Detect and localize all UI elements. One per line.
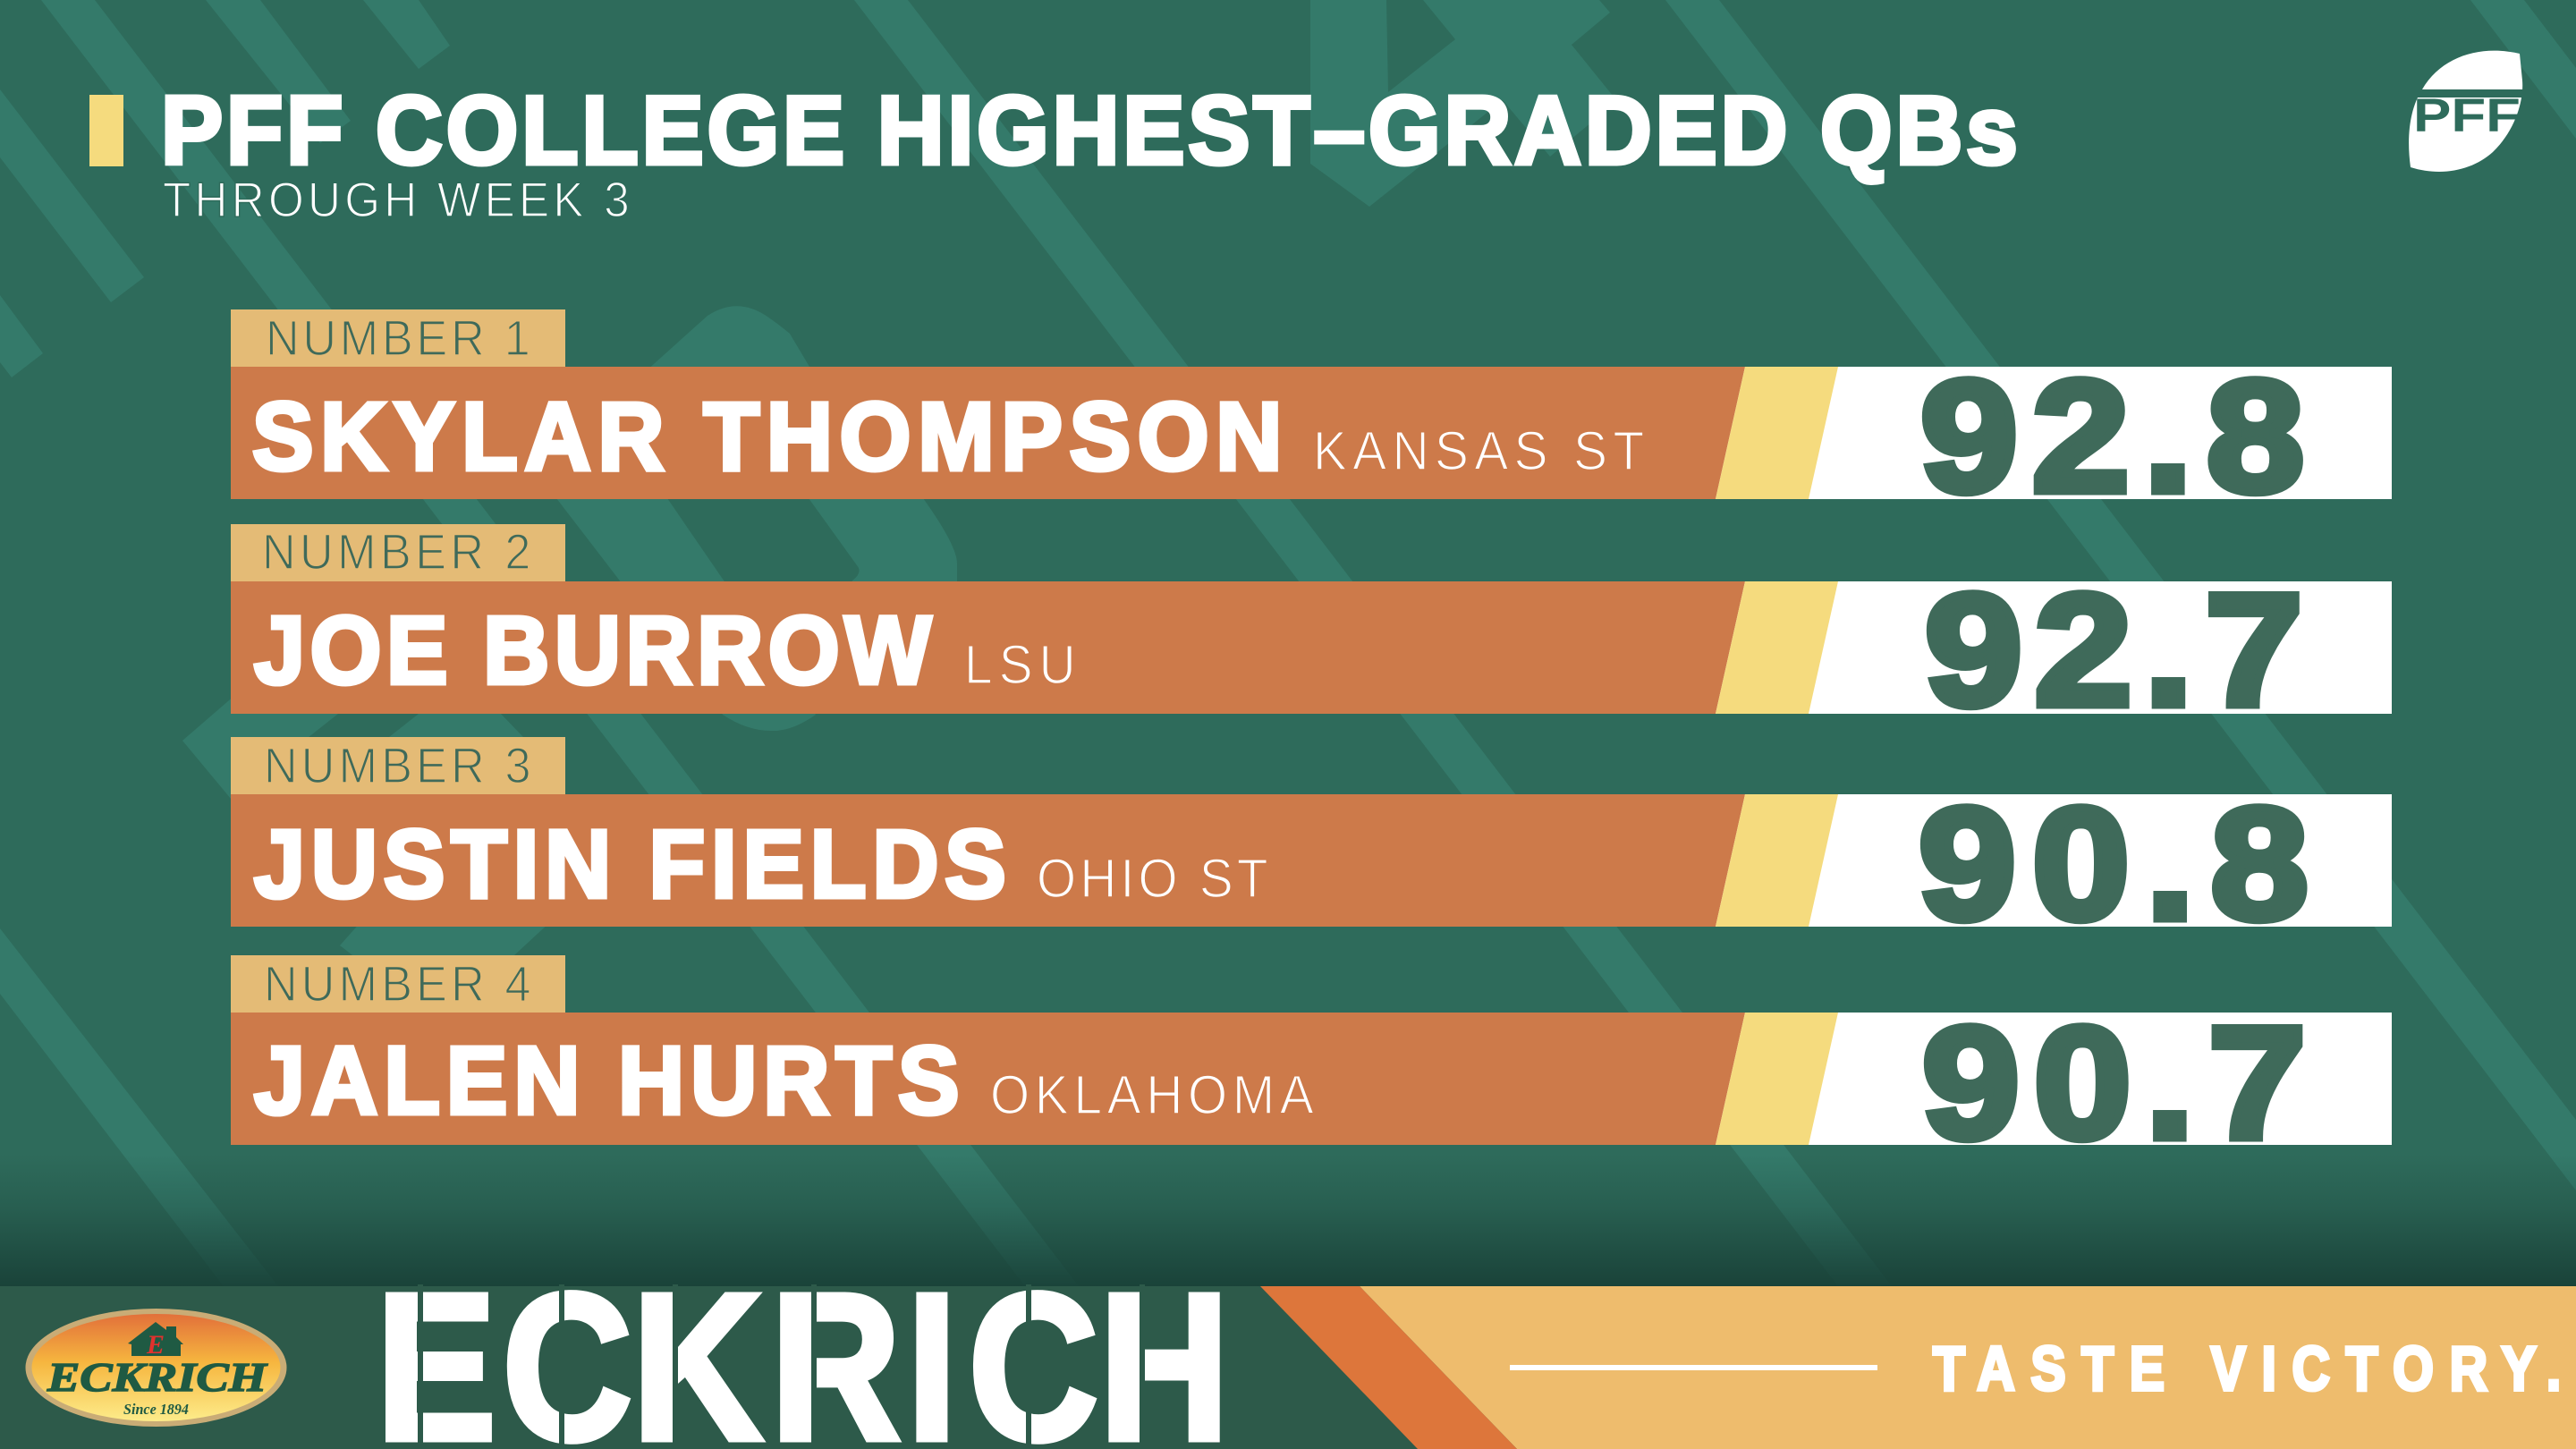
- score panel 4: [1699, 1013, 2392, 1145]
- team 4: OKLAHOMA: [990, 1065, 1314, 1125]
- grade 1: 92.8: [1920, 347, 2304, 525]
- icon: Eckrich oval logo: ECKRICH: [47, 1354, 267, 1400]
- team 2: LSU: [964, 635, 1076, 695]
- rank label 3: NUMBER 3: [264, 738, 531, 793]
- name bar 3: [231, 794, 1745, 927]
- title: PFF COLLEGE HIGHEST–GRADED QBs: [161, 76, 2018, 185]
- team 3: OHIO ST: [1037, 849, 1268, 909]
- rank tab 2: [231, 524, 565, 581]
- score panel 1: [1699, 367, 2392, 499]
- team 1: KANSAS ST: [1313, 421, 1644, 481]
- name bar 1: [231, 367, 1745, 499]
- yellow slash 1: [1716, 367, 1838, 499]
- yellow slash 4: [1716, 1013, 1838, 1145]
- icon: Eckrich oval logo: [25, 1309, 286, 1427]
- bottom shadow gradient: [0, 1154, 2576, 1286]
- row 3: Justin Fields: [231, 737, 2392, 953]
- rank label 4: NUMBER 4: [264, 956, 531, 1012]
- yellow slash 2: [1716, 581, 1838, 714]
- tagline rule: [1510, 1365, 1877, 1370]
- footer orange slash: [1260, 1286, 1517, 1449]
- player name 1: SKYLAR THOMPSON: [252, 384, 1282, 491]
- icon: Eckrich oval logo: E: [146, 1330, 165, 1360]
- footer gold panel: [1360, 1286, 2576, 1449]
- player name 2: JOE BURROW: [254, 597, 932, 705]
- footer base: [0, 1286, 2576, 1449]
- row 2: Joe Burrow: [231, 524, 2392, 739]
- subtitle: THROUGH WEEK 3: [163, 173, 630, 227]
- row 1: Skylar Thompson: [231, 309, 2392, 525]
- rank tab 1: [231, 309, 565, 367]
- yellow slash 3: [1716, 794, 1838, 927]
- name bar 2: [231, 581, 1745, 714]
- title accent bar: [89, 95, 123, 166]
- rank label 1: NUMBER 1: [266, 310, 530, 366]
- row 4: Jalen Hurts: [231, 955, 2392, 1172]
- icon: Eckrich oval logo: Since 1894: [123, 1401, 189, 1418]
- name bar 4: [231, 1013, 1745, 1145]
- grade 2: 92.7: [1925, 561, 2302, 739]
- rank tab 3: [231, 737, 565, 794]
- rank tab 4: [231, 955, 565, 1013]
- icon: PFF football logo: [2409, 51, 2524, 172]
- score panel 2: [1699, 581, 2392, 714]
- icon: PFF football logo: PFF: [2413, 89, 2521, 142]
- player name 4: JALEN HURTS: [254, 1028, 960, 1135]
- score panel 3: [1699, 794, 2392, 927]
- sponsor footer: [0, 1250, 2576, 1449]
- grade 4: 90.7: [1922, 994, 2306, 1172]
- grade 3: 90.8: [1919, 775, 2309, 953]
- player name 3: JUSTIN FIELDS: [254, 811, 1006, 919]
- rank label 2: NUMBER 2: [262, 524, 530, 580]
- tagline: TASTE VICTORY.: [1933, 1333, 2561, 1403]
